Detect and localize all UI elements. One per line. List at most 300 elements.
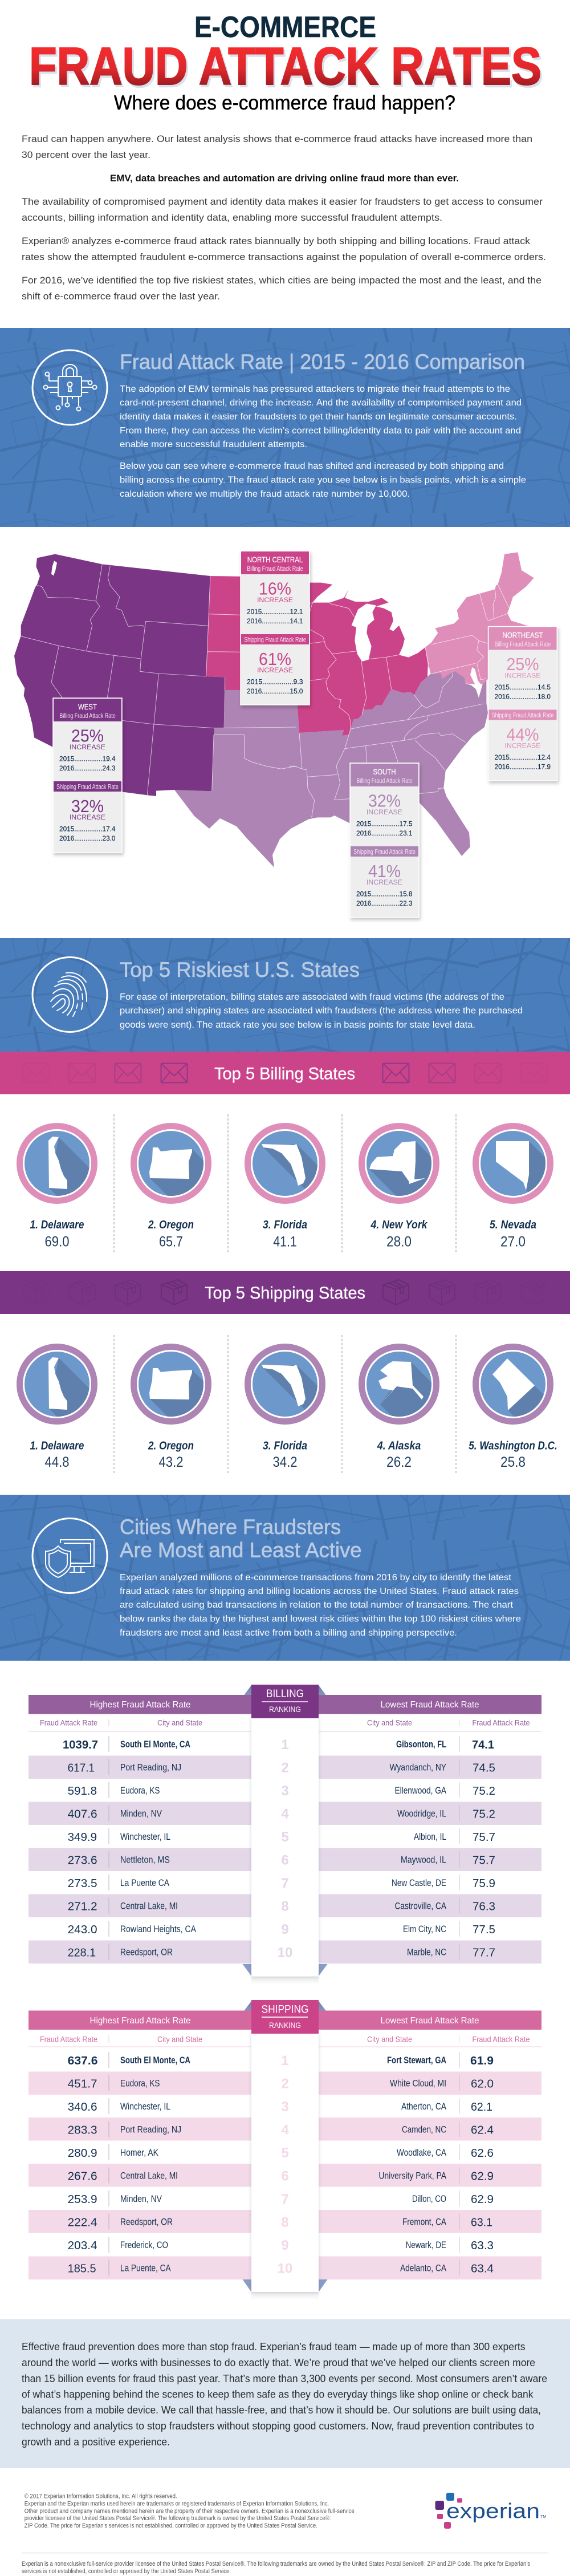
state badge: nevada: [473, 1123, 553, 1247]
label: 4. Alaska: [377, 1439, 421, 1452]
intro text: shift of e-commerce fraud over the last year.: [22, 291, 220, 302]
body text: [120, 1573, 521, 1638]
row 2: 2: [281, 1760, 289, 1776]
state badge: oregon shipping: [131, 1344, 211, 1467]
row 10: 77.7: [473, 1947, 495, 1960]
callout: northeast: 2016...............18.0: [495, 692, 551, 700]
row 2: [68, 2076, 494, 2092]
callout: north central: [241, 551, 310, 705]
column headings: City and State: [367, 2035, 412, 2044]
state borders west: [21, 564, 296, 795]
row 8: 271.2: [68, 1900, 97, 1913]
row 4: 407.6: [68, 1808, 97, 1820]
dividers billing: [114, 1114, 456, 1253]
row 4: Minden, NV: [120, 1809, 162, 1819]
body text: below ranks the data by the highest and lowest risk cities within the top 100 riskiest cities where: [120, 1614, 521, 1624]
row 10: Marble, NC: [407, 1947, 446, 1957]
row 7: 7: [281, 2192, 289, 2207]
intro text: For 2016, we’ve identified the top five riskiest states, which cities are being impacted the most and the least, and the: [22, 275, 542, 286]
body text: identity data makes it easier for fraudsters to get their hands on legitimate consumer accounts.: [120, 412, 517, 422]
row 9: Elm City, NC: [403, 1924, 446, 1934]
row 3: 62.1: [471, 2101, 492, 2113]
experian logo: experian: [446, 2499, 540, 2523]
row 7: La Puente CA: [120, 1878, 169, 1888]
body text: From there, they can access the victim’s correct billing/identity data to pair with the account and: [120, 426, 521, 436]
row 3: 3: [281, 1783, 289, 1799]
callout: north central: 2015................9.3: [247, 678, 303, 685]
column headings: City and State: [157, 1718, 202, 1727]
row 3: [68, 2099, 492, 2115]
row 6: Nettleton, MS: [120, 1855, 170, 1865]
row 3: Winchester, IL: [120, 2102, 170, 2112]
card header: [489, 627, 556, 650]
callout: north central: INCREASE: [257, 667, 293, 674]
row 1: 1: [281, 1737, 289, 1753]
row 1: 1: [281, 2053, 289, 2068]
row 9: Newark, DE: [406, 2240, 446, 2250]
fold triangles: [244, 1685, 326, 1695]
row 5: [68, 2145, 494, 2161]
puget sound: [51, 561, 57, 575]
row 6: 6: [281, 2168, 289, 2184]
callout: west: INCREASE: [70, 814, 105, 821]
body text: Experian analyzed millions of e-commerce transactions from 2016 by city to identify the latest: [120, 1573, 512, 1583]
column headings: Fraud Attack Rate: [472, 1718, 530, 1727]
row 5: 5: [281, 2145, 289, 2161]
ranking tab: BILLING: [266, 1688, 304, 1700]
region: north central east part: [266, 576, 428, 736]
body text: [120, 992, 523, 1030]
state badge: alaska: [359, 1344, 439, 1467]
row 3: 340.6: [68, 2101, 97, 2113]
row 5: 280.9: [68, 2147, 97, 2160]
state badge: oregon: 65.7: [159, 1234, 183, 1250]
row 1: South El Monte, CA: [120, 2055, 190, 2066]
body text: For ease of interpretation, billing states are associated with fraud victims (the address of the: [120, 992, 504, 1002]
title block: [29, 11, 543, 114]
state badge: new york: 28.0: [386, 1234, 412, 1250]
callout: north central: INCREASE: [257, 597, 293, 604]
body text: goods were sent). The attack rate you see below is in basis points for state level data.: [120, 1020, 475, 1030]
callout: west: 2015...............19.4: [59, 755, 116, 763]
row 2: 62.0: [471, 2078, 494, 2091]
intro text: 30 percent over the last year.: [22, 149, 150, 160]
body text: fraud attack rates for shipping and billing locations across the United States. Fraud attack rates: [120, 1587, 519, 1596]
row 4: Camden, NC: [402, 2125, 446, 2135]
callout: south: SOUTH: [373, 767, 396, 776]
intro text: Experian® analyzes e-commerce fraud attack rates biannually by both shipping and billing locations. Fraud attack: [22, 236, 531, 246]
state badge: new york: [359, 1123, 439, 1247]
row 2: 617.1: [68, 1762, 95, 1775]
fold triangles: [244, 2001, 326, 2011]
column headings: Fraud Attack Rate: [40, 2035, 97, 2044]
callout: northeast: NORTHEAST: [503, 631, 543, 640]
row 10: 228.1: [68, 1947, 96, 1960]
state badge: washington dc: [469, 1344, 556, 1467]
column headings: Highest Fraud Attack Rate: [90, 2016, 191, 2026]
intro text: The availability of compromised payment and identity data makes it easier for fraudsters to get access to consumer: [22, 196, 543, 207]
legal text: © 2017 Experian Information Solutions, Inc. All rights reserved.: [25, 2493, 177, 2500]
column headings: [40, 2016, 530, 2044]
row 3: Ellenwood, GA: [394, 1786, 446, 1796]
row 1: 1039.7: [63, 1739, 98, 1751]
row 4: 62.4: [471, 2124, 494, 2136]
label: 3. Florida: [263, 1439, 307, 1452]
legal text: Experian and the Experian marks used herein are trademarks or registered trademarks of Experian Information Solutions, Inc.: [25, 2501, 329, 2508]
row 5: Woodlake, CA: [397, 2148, 446, 2158]
callout: south: 2015...............15.8: [356, 890, 413, 898]
row 10: [68, 2261, 494, 2277]
callout: north central: 2016...............14.1: [247, 617, 303, 625]
row 9: 243.0: [68, 1924, 97, 1936]
table: billing ranking: [28, 1685, 542, 1985]
shipping band: [54, 781, 121, 792]
callout: north central: NORTH CENTRAL: [247, 555, 303, 564]
row 7: 273.5: [68, 1877, 97, 1890]
region: north central west part: [206, 576, 247, 690]
state badge: florida shipping: 34.2: [272, 1454, 298, 1470]
billing stats: 16%: [259, 578, 291, 599]
heading: Are Most and Least Active: [120, 1539, 362, 1561]
legal text: provider licensee of the United States Postal Service®. The following trademark is owned by the United States Postal Service®:: [25, 2515, 331, 2522]
row 5: [68, 1829, 495, 1845]
callout: south: 2016...............23.1: [356, 829, 413, 837]
shipping band: [489, 709, 556, 720]
experian logo: TM: [540, 2515, 546, 2519]
body text: fraudsters are most and least active from both a billing and shipping perspective.: [120, 1628, 457, 1638]
callout: northeast: 2015...............12.4: [495, 753, 551, 761]
ranking column: [251, 1718, 319, 1977]
panel: closing statement: of what’s happening behind the scenes to keep them safe as they do everyday things like shop online or check bank: [22, 2388, 534, 2400]
state borders east: [289, 585, 509, 817]
callout: northeast: INCREASE: [505, 673, 541, 680]
column headings: [40, 1700, 530, 1727]
billing stats: 25%: [71, 725, 104, 746]
row 9: 9: [281, 2238, 289, 2253]
billing stats: 25%: [506, 654, 539, 674]
shipping band: [351, 846, 418, 857]
heading: Cities Where Fraudsters: [120, 1515, 341, 1539]
ranking tab: SHIPPING: [261, 2004, 309, 2015]
row 2: Wyandanch, NY: [390, 1762, 446, 1772]
state badge: oregon shipping: 43.2: [158, 1454, 184, 1470]
row 4: [68, 2123, 494, 2137]
row 4: [68, 1807, 495, 1822]
row 1: South El Monte, CA: [120, 1739, 190, 1750]
row 2: [68, 1760, 495, 1776]
callout: west: 2016...............23.0: [59, 834, 116, 842]
row 8: 8: [281, 1899, 289, 1914]
region: west: [14, 554, 225, 796]
body text: [120, 384, 526, 499]
row 7: 7: [281, 1876, 289, 1891]
row 9: Rowland Heights, CA: [120, 1924, 196, 1934]
panel: closing statement: around the world — works with businesses to do exactly that. We’re proud that we’ve helped our clients screen more: [22, 2357, 535, 2368]
row 4: 4: [281, 1807, 289, 1822]
banner: top 5 billing states: [0, 1052, 570, 1094]
label: 3. Florida: [263, 1219, 307, 1231]
row 7: Dillon, CO: [412, 2194, 446, 2204]
panel: closing statement: balances from a mobile device. We call that hassle-free, and that’s how it should be. Our solutions are built using data,: [22, 2404, 541, 2416]
callout: northeast: Billing Fraud Attack Rate: [495, 641, 551, 648]
icon: circuit lock: [32, 350, 107, 425]
intro text: rates show the attempted fraudulent e-commerce transactions against the population of overall e-commerce orders.: [22, 251, 546, 262]
row 1: [68, 2053, 494, 2068]
state badge: delaware shipping: 44.8: [44, 1454, 70, 1470]
footnote: services is not established, controlled or approved by the United States Postal Service.: [22, 2568, 231, 2575]
row 9: Frederick, CO: [120, 2240, 168, 2250]
intro text: Fraud can happen anywhere. Our latest analysis shows that e-commerce fraud attacks have increased more than: [22, 133, 532, 144]
state badge: oregon: [131, 1123, 211, 1247]
row 4: 4: [281, 2123, 289, 2137]
header bar: [28, 1695, 542, 1714]
intro text: EMV, data breaches and automation are driving online fraud more than ever.: [110, 173, 459, 184]
callout: south: 2016...............22.3: [356, 899, 413, 907]
state badge: florida: 41.1: [273, 1234, 297, 1250]
panel: top 5 riskiest states: [0, 938, 570, 1052]
row 9: 9: [281, 1922, 289, 1937]
body text: billing across the country. The fraud attack rate you see below is in basis points, which is a simple: [120, 476, 526, 485]
legal text: Other product and company names mentioned herein are the property of their respective owners. Experian is a nonexclusive full-service: [25, 2508, 355, 2514]
ranking tab: [251, 2000, 319, 2034]
icon: shield and monitor: [32, 1518, 107, 1593]
card header: [241, 551, 309, 574]
panel: closing statement: technology and analytics to stop fraudsters without stopping good customers. Now, fraud prevention contributes to: [22, 2420, 534, 2432]
row 9: 203.4: [68, 2240, 97, 2252]
state badge: alaska: 26.2: [386, 1454, 412, 1470]
region: northeast: [425, 552, 534, 684]
row 10: 63.4: [471, 2263, 494, 2275]
callout: north central: 2016...............15.0: [247, 687, 303, 695]
state badge: florida: [245, 1123, 325, 1247]
heading: Top 5 Riskiest U.S. States: [120, 958, 360, 981]
header bar: [28, 2011, 542, 2030]
row 1: Gibsonton, FL: [396, 1739, 446, 1750]
callout: west: Shipping Fraud Attack Rate: [56, 782, 119, 790]
row 3: Atherton, CA: [401, 2102, 446, 2112]
footnote: [22, 2561, 530, 2575]
label: 2. Oregon: [148, 1219, 194, 1231]
callout: west: 2016...............24.3: [59, 764, 116, 772]
row 5: Albion, IL: [414, 1832, 446, 1842]
row 4: 283.3: [68, 2124, 97, 2136]
body text: purchaser) and shipping states are associated with fraudsters (the address where the purchased: [120, 1006, 523, 1016]
banner heading: Top 5 Shipping States: [205, 1284, 365, 1303]
label: 4. New York: [370, 1219, 427, 1231]
row 8: Central Lake, MI: [120, 1901, 178, 1912]
callout: south: [350, 763, 419, 917]
title: e-commerce: E-COMMERCE: [194, 11, 376, 44]
card header: [351, 764, 418, 786]
row 5: Homer, AK: [120, 2148, 158, 2158]
table: shipping ranking: [28, 2000, 542, 2300]
dividers shipping: [114, 1335, 456, 1474]
row 1: 637.6: [68, 2055, 98, 2067]
card header: [54, 699, 121, 721]
state badge: delaware: 69.0: [44, 1234, 70, 1250]
row 10: 185.5: [68, 2263, 96, 2275]
row 8: 76.3: [473, 1900, 495, 1913]
row 1: 61.9: [470, 2055, 494, 2067]
callout: west: WEST: [78, 702, 97, 711]
subtitle: Where does e-commerce fraud happen?: [114, 92, 455, 114]
label: 2. Oregon: [148, 1439, 194, 1452]
body text: are calculated using bad transactions in relation to the total number of transactions. The chart: [120, 1600, 514, 1610]
callout: north central: 2015...............12.1: [247, 608, 303, 616]
row 10: [68, 1945, 495, 1961]
legal text: [25, 2493, 355, 2529]
banner: top 5 shipping states: [0, 1271, 570, 1314]
row 3: Eudora, KS: [120, 1786, 160, 1796]
row 6: 6: [281, 1852, 289, 1868]
row 10: Adelanto, CA: [400, 2263, 446, 2273]
icon: fingerprint: [32, 957, 107, 1032]
row 2: 451.7: [68, 2078, 97, 2091]
heading: Fraud Attack Rate | 2015 - 2016 Comparison: [120, 350, 525, 374]
row 2: 2: [281, 2076, 289, 2092]
row 10: La Puente, CA: [120, 2263, 171, 2273]
row 6: 75.7: [473, 1855, 495, 1867]
panel: closing statement: growth and a positive experience.: [22, 2436, 170, 2448]
banner heading: Top 5 Billing States: [214, 1064, 355, 1084]
row 5: 5: [281, 1829, 289, 1845]
shipping band: [241, 634, 309, 644]
row 2: White Cloud, MI: [390, 2078, 446, 2088]
label: 5. Nevada: [490, 1219, 536, 1231]
body text: Below you can see where e-commerce fraud has shifted and increased by both shipping and: [120, 461, 504, 471]
state badge: nevada: 27.0: [500, 1234, 526, 1250]
state badge: delaware shipping: [17, 1344, 97, 1470]
row 4: Port Reading, NJ: [120, 2125, 181, 2135]
row 8: 8: [281, 2215, 289, 2230]
row 2: Eudora, KS: [120, 2078, 160, 2088]
callout: northeast: 2016...............17.9: [495, 763, 551, 771]
callout: northeast: [488, 626, 557, 781]
row 3: 3: [281, 2099, 289, 2115]
row 5: 75.7: [473, 1831, 495, 1844]
label: 1. Delaware: [30, 1219, 84, 1231]
state badge: florida shipping: [245, 1344, 325, 1467]
row 10: Reedsport, OR: [120, 1947, 173, 1957]
body text: The adoption of EMV terminals has pressured attackers to migrate their fraud attempts to the: [120, 384, 510, 394]
row 8: Castroville, CA: [394, 1901, 446, 1912]
label: 5. Washington D.C.: [469, 1439, 557, 1452]
row 6: 273.6: [68, 1855, 97, 1867]
callout: north central: Billing Fraud Attack Rate: [247, 566, 303, 573]
callout: west: INCREASE: [70, 744, 105, 751]
row 7: [68, 2192, 494, 2207]
shipping stats: 44%: [506, 724, 539, 745]
panel: closing statement: [0, 2319, 570, 2468]
callout: south: 2015...............17.5: [356, 820, 413, 828]
callout: south: INCREASE: [367, 879, 402, 886]
column headings: Lowest Fraud Attack Rate: [381, 2016, 479, 2026]
row 8: 63.1: [471, 2216, 492, 2229]
column headings: City and State: [157, 2035, 202, 2044]
row 3: 75.2: [473, 1785, 495, 1798]
body text: card-not-present channel, driving the increase. And the availability of compromised payment and: [120, 398, 522, 408]
row 5: 62.6: [471, 2147, 494, 2160]
row 6: Maywood, IL: [401, 1855, 446, 1865]
column headings: City and State: [367, 1718, 412, 1727]
row 6: Central Lake, MI: [120, 2171, 178, 2181]
row 6: 267.6: [68, 2171, 97, 2183]
row 8: [68, 2215, 492, 2230]
body text: enable more successful fraudulent attempts.: [120, 440, 307, 449]
row 2: Port Reading, NJ: [120, 1762, 181, 1772]
callout: north central: Shipping Fraud Attack Rate: [244, 635, 306, 643]
lake michigan: [352, 603, 376, 662]
map of the United States by region: [14, 552, 534, 867]
row 6: [68, 2168, 494, 2184]
row 9: 77.5: [473, 1924, 495, 1936]
label: 1. Delaware: [30, 1439, 84, 1452]
row 6: 62.9: [471, 2171, 494, 2183]
panel: closing statement: than 15 billion events for fraud this past year. That’s more than 3,300 events per second. Most consumers aren’t aware: [22, 2373, 547, 2384]
shipping stats: 41%: [368, 861, 401, 881]
row 4: 75.2: [473, 1808, 495, 1820]
row 7: [68, 1876, 495, 1891]
callout: south: Billing Fraud Attack Rate: [356, 778, 413, 785]
row 9: [68, 1922, 495, 1937]
callout: south: INCREASE: [367, 809, 402, 816]
region: south west part: [174, 690, 315, 867]
experian logo: [435, 2493, 546, 2529]
striped rows: [28, 1755, 542, 1964]
striped rows: [28, 2071, 542, 2279]
callout: west: Billing Fraud Attack Rate: [59, 713, 116, 720]
row 5: Winchester, IL: [120, 1832, 170, 1842]
region: south east part: [275, 671, 488, 856]
ranking tab: RANKING: [269, 2021, 301, 2030]
heading: [120, 1515, 362, 1561]
body text: calculation where we multiply the fraud attack rate number by 10,000.: [120, 489, 410, 499]
row 7: 253.9: [68, 2193, 97, 2206]
panel: cities where fraudsters are active: [0, 1495, 570, 1661]
callout: west: [53, 698, 122, 853]
column headings: Lowest Fraud Attack Rate: [381, 1700, 479, 1710]
row 7: 62.9: [471, 2193, 494, 2206]
column headings: Fraud Attack Rate: [472, 2035, 530, 2044]
row 8: Fremont, CA: [402, 2217, 446, 2228]
row 9: [68, 2238, 494, 2253]
row 6: [68, 1852, 495, 1868]
row 7: Minden, NV: [120, 2194, 162, 2204]
row 8: 222.4: [68, 2216, 97, 2229]
row 6: University Park, PA: [378, 2171, 446, 2181]
row 1: [63, 1737, 494, 1753]
callout: south: Shipping Fraud Attack Rate: [353, 847, 416, 855]
ranking column: [251, 2034, 319, 2292]
callout: west: 2015...............17.4: [59, 825, 116, 833]
billing stats: 32%: [368, 790, 401, 811]
row 7: New Castle, DE: [392, 1878, 446, 1888]
row 3: 591.8: [68, 1785, 97, 1798]
row 4: Woodridge, IL: [397, 1809, 446, 1819]
legal text: ZIP Code. The price for Experian’s services is not established, controlled or approved by the United States Postal Service.: [25, 2522, 317, 2529]
intro text: [22, 133, 546, 302]
row 10: 10: [278, 2261, 292, 2277]
row 1: 74.1: [472, 1739, 494, 1751]
row 8: [68, 1899, 495, 1914]
row 3: [68, 1783, 495, 1799]
chesapeake bay: [470, 667, 482, 697]
footer rule: [22, 2553, 548, 2554]
intro text: accounts, billing information and identity data, enabling more successful fraudulent attempts.: [22, 212, 442, 223]
row 7: 75.9: [473, 1877, 495, 1890]
row 5: 349.9: [68, 1831, 97, 1844]
ranking tab: RANKING: [269, 1705, 301, 1714]
